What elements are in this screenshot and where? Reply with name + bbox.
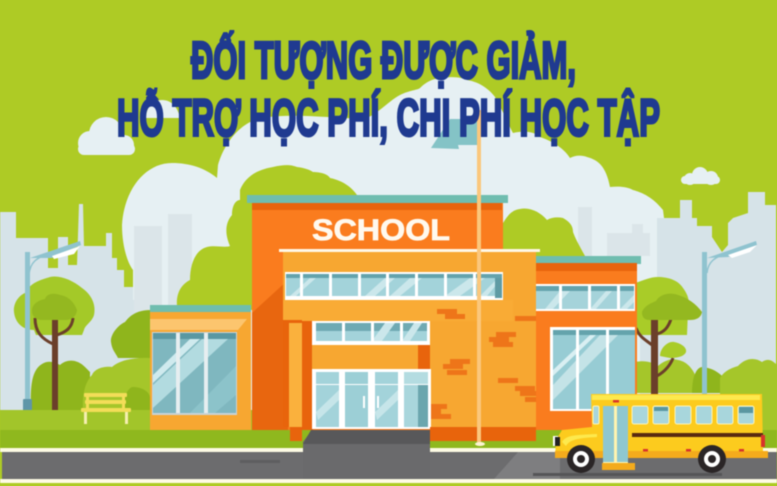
small cloud left xyxy=(78,100,180,155)
school bus xyxy=(533,394,768,476)
right street lamp xyxy=(702,241,757,396)
base of building xyxy=(430,427,536,441)
bench xyxy=(81,393,131,424)
entrance steps xyxy=(303,431,430,479)
title xyxy=(117,31,660,148)
left wing window xyxy=(152,332,237,415)
city skyline left xyxy=(0,204,150,410)
city skyline right xyxy=(640,192,776,420)
left tree and bushes xyxy=(14,277,150,410)
bus body xyxy=(555,394,768,458)
bush behind school left xyxy=(177,165,357,310)
bus door xyxy=(602,406,635,470)
big cloud xyxy=(122,77,690,420)
sign: SCHOOL: SCHOOL xyxy=(312,214,450,247)
small cloud right xyxy=(681,167,720,185)
left wing of school xyxy=(150,305,251,430)
left street lamp xyxy=(16,241,81,428)
front wheel xyxy=(567,445,595,473)
upper strip window xyxy=(285,272,503,300)
flag pole xyxy=(475,110,485,446)
center block xyxy=(279,249,540,441)
city skyline right pale xyxy=(578,207,650,257)
rear wheel xyxy=(698,445,726,473)
right wing big window xyxy=(550,327,635,411)
pale towers behind school left xyxy=(134,214,192,314)
road xyxy=(0,448,777,483)
right tree and bushes xyxy=(635,277,777,430)
bush behind school right xyxy=(503,209,585,260)
right wing strip window xyxy=(536,284,635,311)
flag xyxy=(431,119,477,149)
center tower xyxy=(247,195,508,430)
ground xyxy=(0,410,777,431)
entrance upper window xyxy=(312,321,430,345)
bus windows xyxy=(593,406,754,424)
entrance doors xyxy=(312,369,431,429)
entrance column xyxy=(283,320,313,441)
bricks xyxy=(431,309,536,419)
right wing of school xyxy=(536,256,641,430)
top step xyxy=(303,430,430,444)
